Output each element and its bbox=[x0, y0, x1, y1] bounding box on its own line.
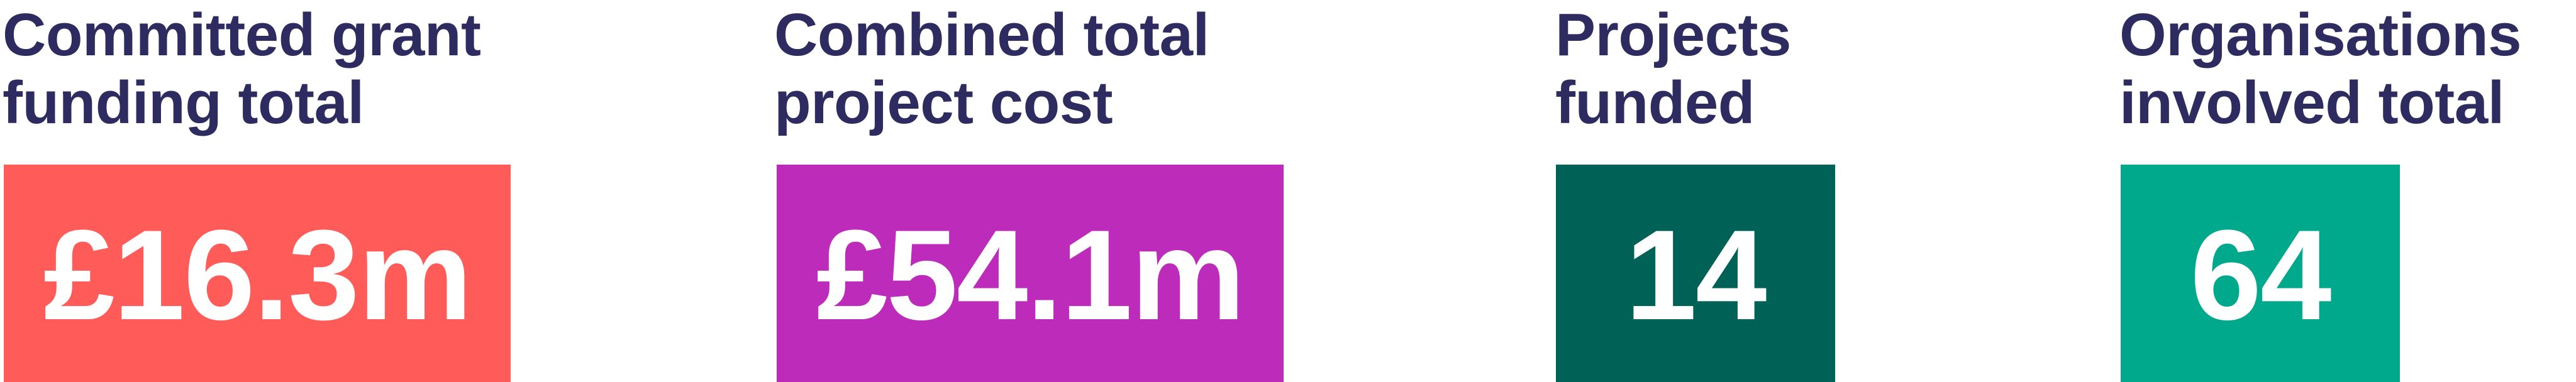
heading: projects funded: funded bbox=[1555, 69, 1755, 136]
panel: committed grant funding bbox=[3, 1, 511, 382]
heading: combined total: Combined total bbox=[774, 1, 1209, 68]
heading: committed grant: funding total bbox=[3, 69, 364, 136]
heading: projects funded: Projects bbox=[1555, 1, 1791, 68]
heading: combined total bbox=[774, 1, 1209, 136]
panel: combined total project cost bbox=[774, 1, 1284, 382]
stat box: 14 bbox=[1556, 165, 1835, 382]
stat box: £54.1m: £54.1m bbox=[816, 204, 1244, 347]
stat box: £16.3m: £16.3m bbox=[43, 204, 471, 347]
panel: organisations involved bbox=[2119, 1, 2521, 382]
stat box: 64 bbox=[2121, 165, 2400, 382]
stat box: 14: 14 bbox=[1626, 204, 1765, 347]
heading: committed grant bbox=[3, 1, 480, 136]
heading: organisations involved: involved total bbox=[2119, 69, 2504, 136]
heading: committed grant: Committed grant bbox=[3, 1, 480, 68]
stat box: 64: 64 bbox=[2190, 204, 2330, 347]
heading: organisations involved bbox=[2119, 1, 2521, 136]
heading: projects funded bbox=[1555, 1, 1791, 136]
heading: combined total: project cost bbox=[774, 69, 1113, 136]
stat box: £16.3m bbox=[4, 165, 511, 382]
stat box: £54.1m bbox=[777, 165, 1284, 382]
heading: organisations involved: Organisations bbox=[2119, 1, 2521, 68]
panel: projects funded bbox=[1555, 1, 1835, 382]
